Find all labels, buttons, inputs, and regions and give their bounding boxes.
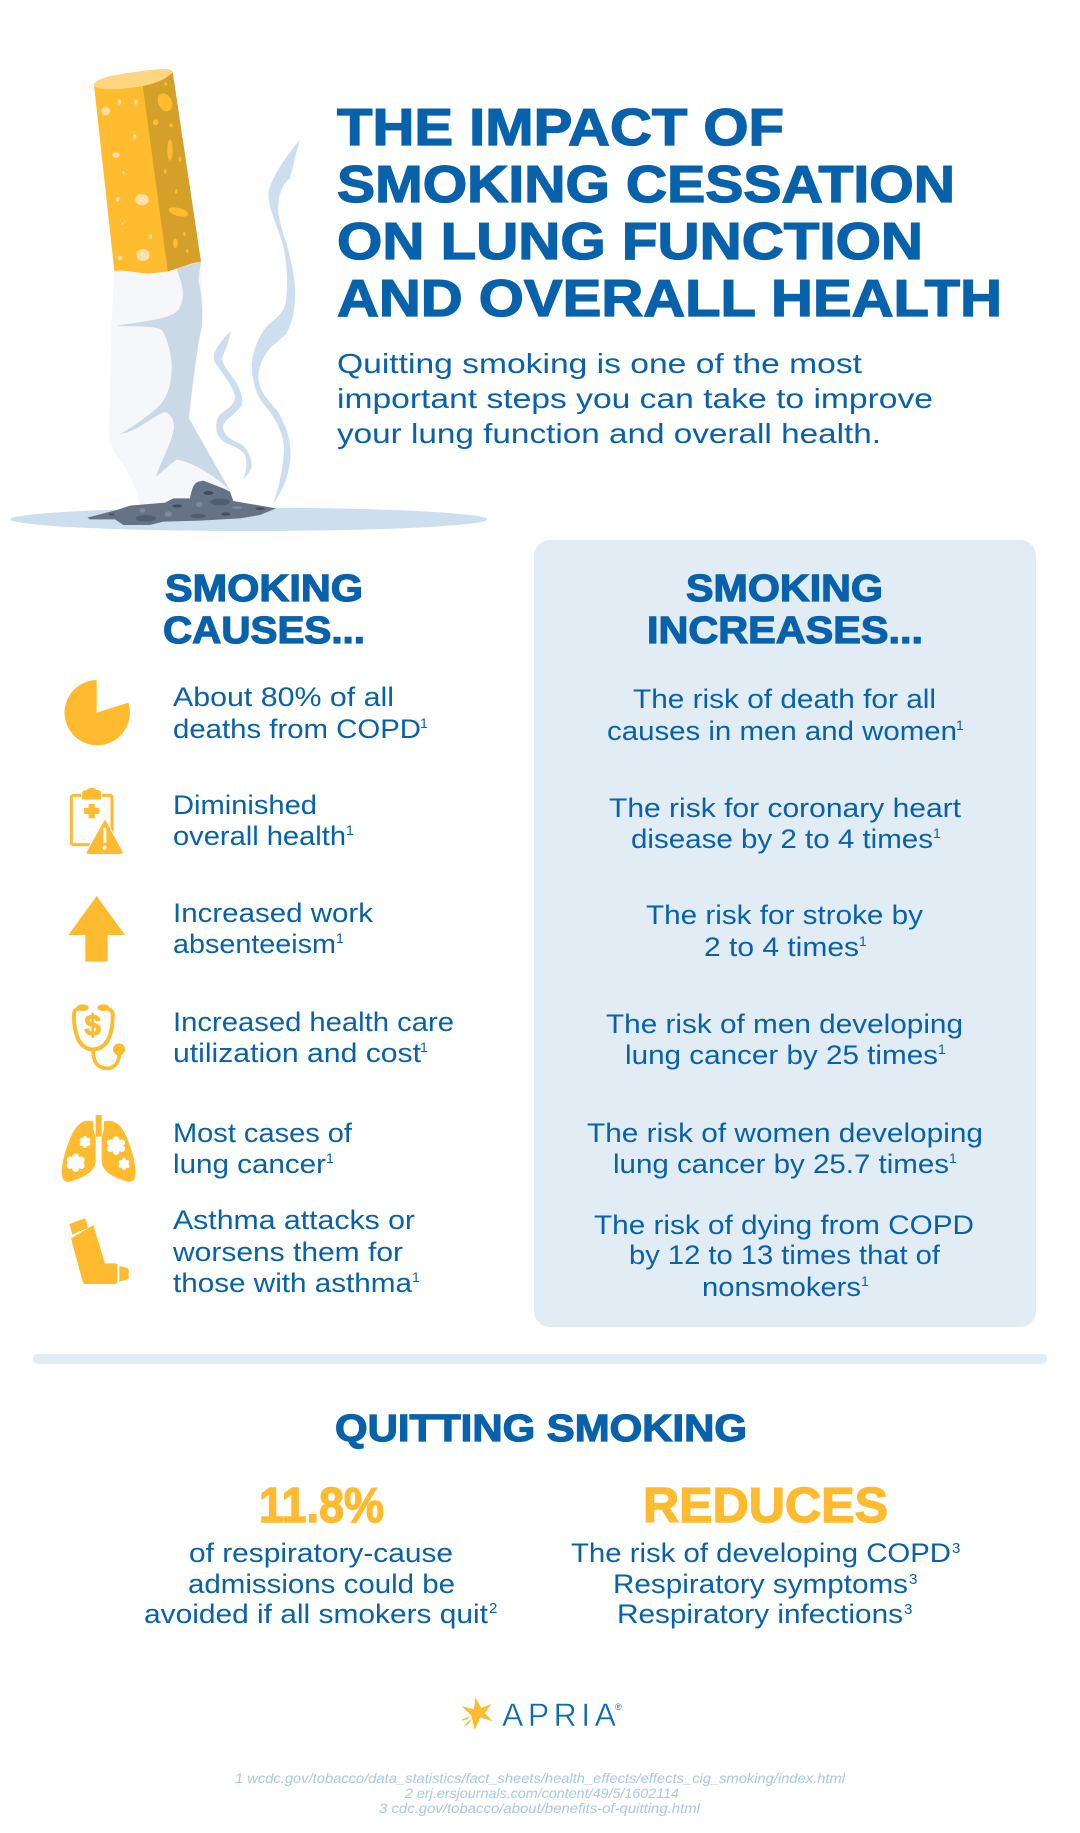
filter right face — [143, 72, 201, 272]
ground shadow — [11, 508, 487, 531]
risk: coronary heart disease: disease by 2 to 4 times — [631, 824, 933, 854]
item: health care cost — [173, 1007, 454, 1068]
icon: lungs with tumours — [62, 1115, 136, 1182]
item: diminished health: overall health — [173, 821, 346, 851]
filter speckles dark side — [153, 82, 189, 253]
risk: coronary heart disease: The risk for coronary heart — [609, 793, 962, 823]
risk: coronary heart disease — [609, 793, 962, 854]
item: work absenteeism: 1 — [336, 930, 344, 946]
footnotes — [235, 1770, 846, 1816]
item: lung cancer — [173, 1118, 353, 1179]
heading: smoking causes: CAUSES... — [163, 610, 365, 652]
item: COPD deaths: 1 — [420, 715, 428, 731]
divider bar — [33, 1354, 1047, 1364]
cigarette paper — [109, 262, 230, 506]
filter top — [94, 69, 173, 89]
icon: clipboard with warning triangle — [71, 787, 125, 857]
risk: death all causes: causes in men and women — [607, 716, 957, 746]
footnotes: 1 wcdc.gov/tobacco/data_statistics/fact_sheets/health_effects/effects_cig_smoking/index.html — [235, 1770, 846, 1786]
item: work absenteeism: absenteeism — [173, 929, 336, 959]
item: COPD deaths: deaths from COPD — [173, 714, 421, 744]
item: diminished health — [173, 790, 354, 851]
risk: men lung cancer — [606, 1009, 963, 1070]
ash pile — [87, 481, 276, 525]
small smoke wisp — [214, 331, 252, 479]
stat: 11.8 percent: 11.8% — [259, 1479, 384, 1533]
risk: stroke: 1 — [859, 933, 867, 949]
item: diminished health: 1 — [346, 822, 354, 838]
filter left face — [94, 85, 168, 273]
ash texture — [109, 491, 265, 522]
risk: coronary heart disease: 1 — [933, 825, 941, 841]
filter speckles light — [101, 99, 152, 261]
risk: stroke: 2 to 4 times — [704, 932, 859, 962]
stat description — [144, 1538, 497, 1629]
item: health care cost: Increased health care — [173, 1007, 454, 1037]
risk: women lung cancer: The risk of women developing — [587, 1118, 983, 1148]
footnotes: 2 erj.ersjournals.com/content/49/5/1602114 — [404, 1785, 679, 1801]
intro text: Quitting smoking is one of the most — [337, 348, 862, 379]
risk: stroke — [646, 900, 924, 962]
reduces list: Respiratory symptoms — [613, 1569, 908, 1599]
item: diminished health: Diminished — [173, 790, 317, 820]
risk: women lung cancer: lung cancer by 25.7 times — [613, 1149, 949, 1179]
risk: dying from COPD — [594, 1210, 974, 1302]
heading: smoking increases — [647, 568, 923, 652]
reduces list: 3 — [952, 1540, 960, 1557]
heading: quitting smoking: QUITTING SMOKING — [335, 1408, 747, 1450]
logo: Apria: APRIA — [502, 1697, 617, 1733]
large smoke wisp — [252, 139, 300, 503]
reduces list: 3 — [909, 1571, 917, 1588]
item: asthma — [172, 1205, 420, 1298]
heading: smoking causes: SMOKING — [165, 568, 363, 610]
heading: smoking increases: SMOKING — [686, 568, 883, 610]
reduces list: Respiratory infections — [617, 1599, 903, 1629]
item: asthma: those with asthma — [173, 1268, 412, 1298]
paper shading — [117, 262, 230, 491]
item: asthma: Asthma attacks or — [173, 1205, 415, 1235]
icon: up arrow — [68, 896, 125, 962]
item: asthma: worsens them for — [172, 1237, 403, 1267]
item: COPD deaths — [173, 682, 428, 744]
item: lung cancer: 1 — [326, 1150, 334, 1166]
risk: dying from COPD: The risk of dying from COPD — [594, 1210, 974, 1240]
icon: pie chart 80 percent — [65, 680, 130, 745]
item: asthma: 1 — [412, 1269, 420, 1285]
logo: Apria: ® — [615, 1702, 622, 1712]
item: work absenteeism: Increased work — [173, 898, 374, 928]
panel: smoking increases background — [534, 540, 1036, 1327]
risk: men lung cancer: 1 — [938, 1041, 946, 1057]
title: ON LUNG FUNCTION — [337, 213, 923, 271]
heading: smoking causes — [163, 568, 365, 652]
risk: death all causes: 1 — [956, 717, 964, 733]
item: lung cancer: Most cases of — [173, 1118, 353, 1148]
risk: dying from COPD: by 12 to 13 times that of — [629, 1240, 941, 1270]
risk: women lung cancer: 1 — [949, 1150, 957, 1166]
item: health care cost: 1 — [420, 1039, 428, 1055]
risk: dying from COPD: 1 — [861, 1273, 869, 1289]
risk: death all causes: The risk of death for all — [633, 684, 936, 714]
intro text: your lung function and overall health. — [337, 418, 881, 449]
item: work absenteeism — [173, 898, 374, 959]
risk: stroke: The risk for stroke by — [646, 900, 924, 930]
item: lung cancer: lung cancer — [173, 1149, 326, 1179]
risk: men lung cancer: lung cancer by 25 times — [625, 1040, 938, 1070]
footnotes: 3 cdc.gov/tobacco/about/benefits-of-quitting.html — [379, 1800, 701, 1816]
stat description: avoided if all smokers quit — [144, 1599, 489, 1629]
icon: stethoscope with dollar sign — [74, 1004, 125, 1068]
reduces list — [571, 1538, 960, 1629]
risk: women lung cancer — [587, 1118, 983, 1179]
risk: dying from COPD: nonsmokers — [702, 1272, 861, 1302]
title: AND OVERALL HEALTH — [337, 270, 1002, 328]
stat description: 2 — [489, 1600, 497, 1617]
title — [337, 99, 1002, 328]
intro text — [337, 348, 933, 449]
intro text: important steps you can take to improve — [337, 383, 933, 414]
logo star — [462, 1697, 493, 1730]
reduces list: 3 — [904, 1601, 912, 1618]
stat description: admissions could be — [188, 1569, 455, 1599]
risk: men lung cancer: The risk of men developing — [606, 1009, 963, 1039]
stat description: of respiratory-cause — [189, 1538, 453, 1568]
heading: smoking increases: INCREASES... — [647, 610, 923, 652]
reduces list: The risk of developing COPD — [571, 1538, 951, 1568]
illustration: stubbed cigarette with smoke — [11, 69, 487, 531]
item: health care cost: utilization and cost — [173, 1038, 422, 1068]
item: COPD deaths: About 80% of all — [173, 682, 394, 712]
risk: death all causes — [607, 684, 964, 746]
title: THE IMPACT OF — [337, 99, 784, 157]
heading: reduces: REDUCES — [643, 1479, 888, 1533]
icon: stethoscope with dollar sign: $ — [85, 1009, 101, 1042]
title: SMOKING CESSATION — [337, 156, 955, 214]
icon: inhaler — [69, 1219, 129, 1284]
